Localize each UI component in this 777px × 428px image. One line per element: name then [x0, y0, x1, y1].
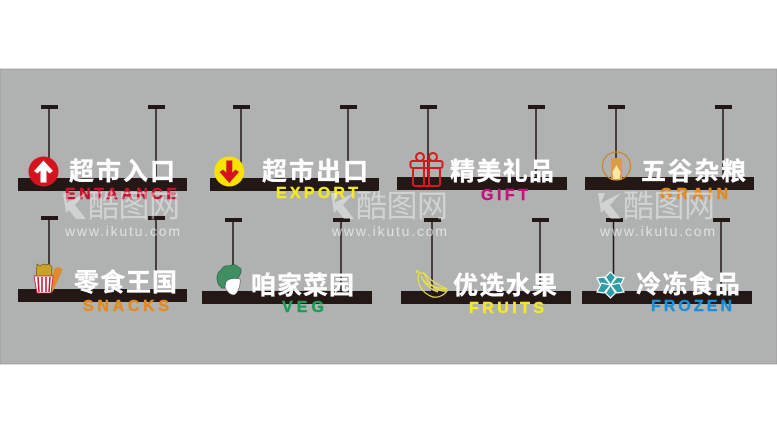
icon: grain circle	[602, 152, 630, 180]
watermark: left	[63, 189, 180, 239]
watermark: center	[331, 189, 448, 239]
heading: frozen: 冷冻食品	[636, 270, 740, 299]
label: GIFT: GIFT	[481, 187, 528, 204]
watermark: right	[598, 189, 715, 239]
icon: fries and hot dog	[34, 264, 62, 293]
sign: frozen	[582, 218, 752, 315]
icon: bok choy	[217, 265, 241, 295]
heading: exit: 超市出口	[262, 158, 368, 186]
icon: banana bunch	[417, 270, 447, 297]
heading: vegetables: 咱家菜园	[251, 272, 354, 300]
icon: snowflake	[597, 272, 624, 298]
watermark: left: 酷图网	[88, 189, 180, 224]
heading: grain: 五谷杂粮	[641, 158, 746, 186]
sign: supermarket entrance	[18, 105, 187, 203]
sign: gifts	[397, 105, 567, 204]
heading: snacks: 零食王国	[74, 268, 177, 297]
sign: grain	[585, 105, 754, 203]
gray background band	[0, 69, 777, 364]
icon: red up arrow	[28, 156, 58, 186]
heading: gifts: 精美礼品	[450, 158, 554, 186]
heading: fruits: 优选水果	[453, 272, 557, 300]
label: GRAIN: GRAIN	[660, 186, 728, 203]
icon: red gift box	[410, 153, 442, 186]
label: SNACKS: SNACKS	[83, 298, 169, 315]
label: FRUITS: FRUITS	[469, 300, 544, 317]
label: VEG: VEG	[282, 299, 324, 316]
sign: fruits	[401, 218, 571, 317]
label: EXPORT: EXPORT	[276, 185, 358, 202]
watermark: center: 酷图网	[356, 189, 448, 224]
watermark: right: 酷图网	[623, 189, 715, 224]
watermark: right: www.ikutu.com	[599, 223, 715, 239]
label: ENTAANCE: ENTAANCE	[65, 186, 177, 203]
sign: supermarket exit	[210, 105, 379, 202]
icon: yellow down arrow	[214, 156, 244, 186]
label: FROZEN: FROZEN	[651, 298, 732, 315]
watermark: left: www.ikutu.com	[64, 223, 180, 239]
heading: entrance: 超市入口	[69, 158, 175, 186]
sign: snacks	[18, 216, 187, 315]
sign: vegetables	[202, 218, 372, 316]
watermark: center: www.ikutu.com	[331, 223, 447, 239]
